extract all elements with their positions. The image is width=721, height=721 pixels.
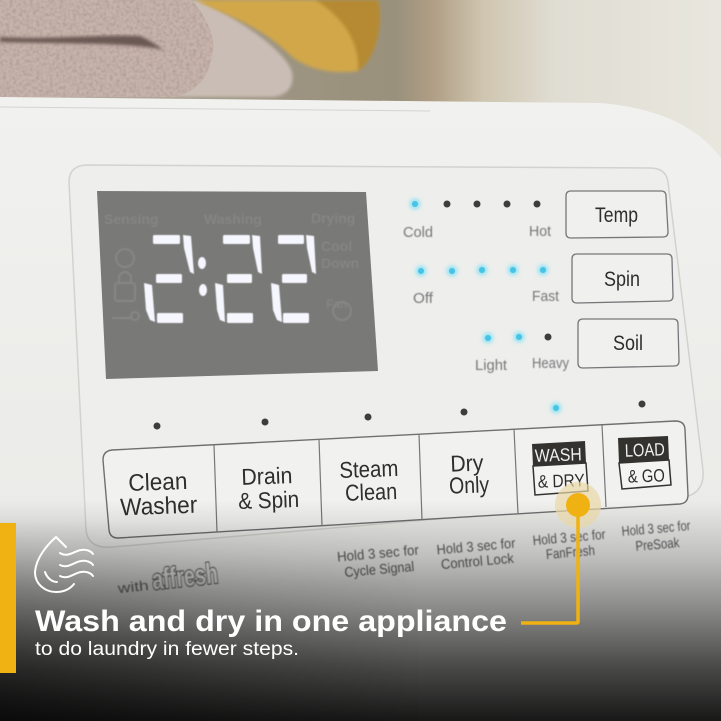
button: Soil: Soil [613,332,643,355]
LED scale labels: Hot [529,223,552,240]
display ghost labels [104,210,359,311]
display ghost labels: Cool [321,238,352,254]
indicator LEDs: temp, spin, soil [154,199,646,430]
button label: Steam Clean [339,455,400,506]
LED scale labels: Cold [403,224,433,241]
button label: Drain & Spin: Drain [241,462,293,490]
hold-for captions [336,517,693,581]
icon: folded yellow towel [195,0,380,72]
button: Spin: Spin [604,268,640,291]
hold-for captions: PreSoak [635,534,681,554]
button label: Drain & Spin: & Spin [238,486,300,514]
button: Temp: Temp [595,204,638,227]
logo: WASH & DRY: & DRY [537,470,585,492]
logo: WASH & DRY [532,441,588,495]
callout: yellow marker and leader line [521,482,601,623]
yellow accent bar [0,523,16,673]
button label: Clean Washer: Clean [128,468,188,497]
display ghost labels: Washing [204,211,262,227]
with affresh logo: with [116,577,149,596]
background: wall and towels [0,0,721,200]
hold-for captions: Hold 3 sec for [336,541,420,565]
button label: Clean Washer [119,468,198,521]
logo: WASH & DRY: WASH [534,444,582,466]
hold-for captions: Control Lock [440,550,515,572]
logo: LOAD & GO [618,436,671,489]
hold-for captions: Hold 3 sec for [436,535,516,557]
button label: Dry Only: Only [449,471,490,499]
LED scale labels: Light [475,357,508,374]
button row: cycle buttons [103,421,688,538]
button: Temp [566,191,668,238]
logo: LOAD & GO: & GO [627,465,665,487]
icon: water drop with waves [35,537,93,592]
gradient overlay [0,500,721,721]
display ghost labels: Drying [311,210,355,226]
button label: Dry Only: Dry [450,449,484,477]
display ghost labels: Sensing [104,211,158,227]
button label: Steam Clean: Steam [339,455,399,483]
heading: Wash and dry in one appliance [35,605,507,638]
button label: Clean Washer: Washer [120,492,198,521]
hold-for captions: Cycle Signal [344,558,415,580]
logo: LOAD & GO: LOAD [624,439,665,461]
LED scale labels: Fast [532,288,560,305]
button: Spin [572,254,673,303]
button label: Drain & Spin [237,462,300,514]
LED scale labels: Off [413,290,434,307]
button label: Steam Clean: Clean [345,478,398,506]
button label: Dry Only [448,449,490,499]
display ghost labels: Down [321,255,359,271]
with affresh logo [114,558,219,600]
panel: control panel outline [69,165,703,547]
with affresh logo: affresh [151,558,219,596]
hold-for captions: Hold 3 sec for [621,517,691,539]
hold-for captions: Hold 3 sec for [532,526,606,548]
LED scale labels [403,223,569,374]
icon: folded pink towel [0,0,293,97]
clock digits 2:22 [144,235,316,323]
panel: time display [97,191,378,379]
icon: ghost status icons [112,249,351,320]
subheading: to do laundry in fewer steps. [35,639,299,660]
LED scale labels: Heavy [532,355,569,372]
button: Soil [578,319,679,368]
hold-for captions: FanFresh [545,542,595,562]
display ghost labels: Fan [326,297,347,311]
